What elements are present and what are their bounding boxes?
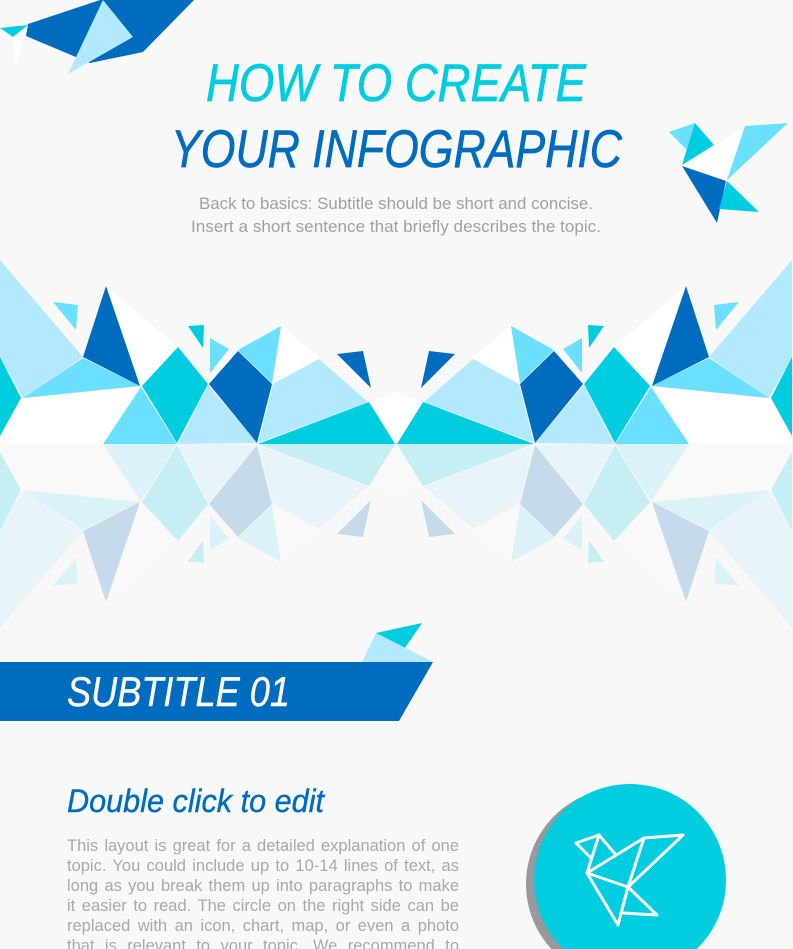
- polygon landscape: [0, 260, 792, 444]
- subtitle text: Insert a short sentence that briefly describes the topic.: [191, 218, 601, 236]
- icon: section bird: [362, 623, 433, 662]
- section banner: [0, 662, 433, 721]
- icon: top-right origami bird: [669, 123, 788, 223]
- body text: topic. You could include up to 10-14 lines of text, as: [67, 857, 459, 875]
- body text: [67, 837, 459, 949]
- section banner: SUBTITLE 01: [67, 668, 290, 715]
- subtitle text: [191, 195, 601, 236]
- subtitle text: Back to basics: Subtitle should be short and concise.: [199, 195, 593, 213]
- title: HOW TO CREATE: [206, 54, 587, 113]
- circle with bird icon: [526, 784, 726, 949]
- icon: top-left origami bird: [0, 0, 194, 74]
- title: YOUR INFOGRAPHIC: [171, 120, 623, 179]
- body text: replaced with an icon, chart, map, or even a photo: [67, 917, 459, 935]
- title: [171, 54, 623, 179]
- body text: it easier to read. The circle on the right side can be: [67, 897, 459, 915]
- body text: This layout is great for a detailed explanation of one: [67, 837, 459, 855]
- section heading: Double click to edit: [67, 783, 325, 819]
- body text: long as you break them up into paragraphs to make: [67, 877, 459, 895]
- polygon landscape reflection: [0, 444, 792, 628]
